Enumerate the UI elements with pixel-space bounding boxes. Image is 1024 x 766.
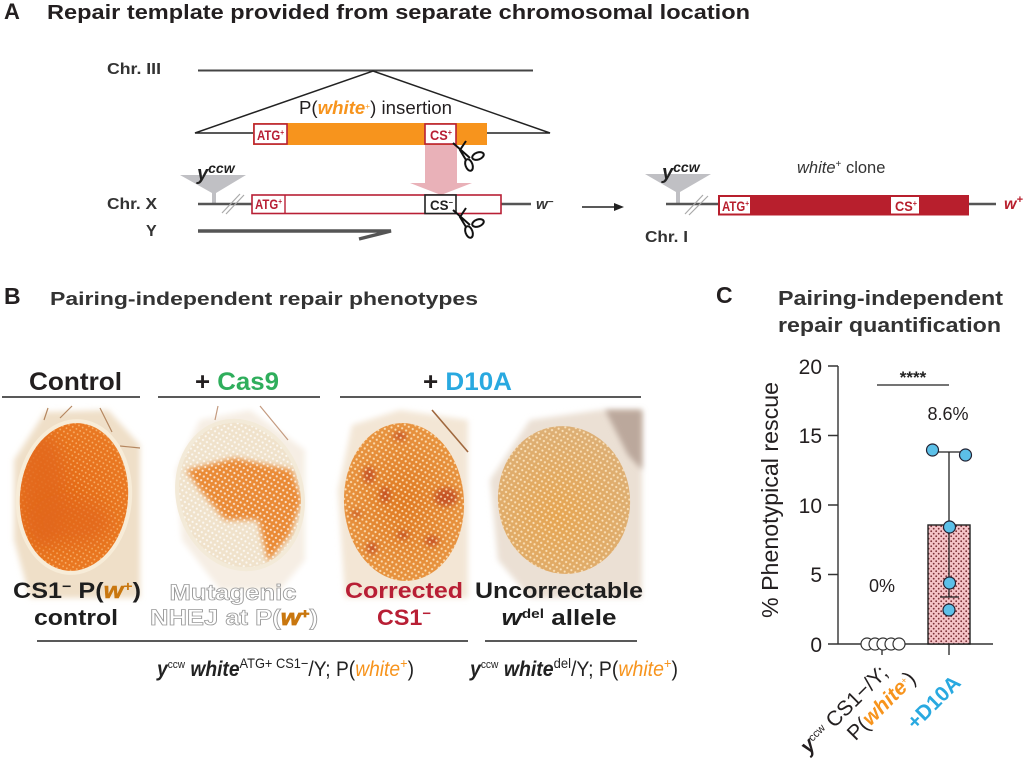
white- allele box <box>252 195 501 214</box>
CS+ box: CS <box>430 127 449 143</box>
y tick labels: 0 <box>810 634 822 657</box>
genotype bracket: ATG+ CS1-: white <box>355 658 400 681</box>
caption: Corrected CS1-: − <box>422 605 431 621</box>
x label: control <box>795 661 921 759</box>
y tick labels <box>799 356 822 657</box>
heading: panel A title: Repair template provided from separate chromosomal location <box>47 2 750 24</box>
y ccw marker: ccw <box>208 160 236 176</box>
panel letter C: C <box>716 282 733 308</box>
ATG+ white box: ATG <box>722 198 751 214</box>
caption: CS1- P(w+) control: control <box>34 605 118 630</box>
eye photo: control <box>9 406 140 598</box>
y ccw marker <box>180 160 246 204</box>
caption: CS1- P(w+) control: CS1 <box>13 578 56 603</box>
panel letter B: B <box>4 283 21 309</box>
caption: CS1- P(w+) control: w <box>104 578 125 603</box>
ATG+ box <box>254 124 287 144</box>
x label: control: ) <box>899 667 921 688</box>
heading: panel C title <box>778 288 1003 337</box>
genotype bracket: white del: y <box>469 658 482 681</box>
CS+ white box <box>891 197 919 214</box>
label: Chr. X: Chr. X <box>107 196 157 213</box>
ATG+ box: + <box>280 128 284 137</box>
x label: control: ccw <box>806 722 828 744</box>
Chr. III line <box>198 70 533 72</box>
genotype bracket: ATG+ CS1-: ccw <box>168 659 185 671</box>
genotype bracket: white del <box>469 641 678 681</box>
break mark <box>685 195 708 215</box>
label: Y: Y <box>146 223 157 240</box>
caption: Mutagenic NHEJ: Mutagenic <box>170 580 296 605</box>
y tick labels: 15 <box>799 425 822 448</box>
heading: panel B title: Pairing-independent repair phenotypes <box>50 289 478 309</box>
genotype bracket: ATG+ CS1-: ATG+ CS1− <box>240 655 308 671</box>
ATG+ allele label: ATG <box>255 196 284 212</box>
label: w-: w <box>536 196 548 213</box>
genotype bracket: white del: + <box>664 655 672 671</box>
arrow to clone <box>582 203 624 211</box>
x label: control: P(white <box>843 676 912 745</box>
value label 8.6%: 8.6% <box>927 404 969 424</box>
genotype bracket: white del: ccw <box>481 659 498 671</box>
genotype bracket: ATG+ CS1-: /Y; P( <box>308 658 355 681</box>
column header: Control <box>2 368 140 397</box>
caption: CS1- P(w+) control: + <box>123 578 133 594</box>
caption: Corrected CS1-: Corrected <box>345 578 463 603</box>
caption: Uncorrectable wdel allele: allele <box>544 605 616 630</box>
column header: + Cas9: + Cas9 <box>195 368 279 396</box>
ATG+ allele label: + <box>278 197 282 206</box>
genotype bracket: white del: white <box>498 658 554 681</box>
CS- box: CS <box>430 197 449 213</box>
caption: Uncorrectable wdel allele: del <box>522 606 544 621</box>
icon: scissors lower <box>453 208 485 239</box>
clone chromosome line <box>666 203 996 205</box>
caption: Mutagenic NHEJ: ) <box>309 605 318 630</box>
genotype bracket: white del: white <box>618 658 664 681</box>
genotype bracket: white del: del <box>554 655 571 671</box>
caption: Uncorrectable wdel allele <box>475 578 643 630</box>
red repaired bar <box>718 195 969 216</box>
y ccw marker, clone: ccw <box>673 159 701 175</box>
y axis and ticks <box>828 366 993 655</box>
label: P(white+) insertion: + <box>365 102 370 111</box>
ATG+ white box: + <box>745 199 749 208</box>
icon: scissors upper <box>453 141 485 172</box>
caption: CS1- P(w+) control: − <box>62 578 71 594</box>
eye photo: corrected D10A <box>338 410 468 598</box>
heading: panel C title: Pairing-independent <box>778 288 1003 310</box>
x label: +D10A: +D10A <box>903 671 966 734</box>
x label: control: y <box>795 733 821 759</box>
ATG+ box: ATG <box>257 127 286 143</box>
column header: + D10A: + D10A <box>423 368 512 396</box>
heading: panel C title: repair quantification <box>778 315 1001 337</box>
caption: Mutagenic NHEJ <box>150 580 318 630</box>
genotype bracket: ATG+ CS1-: white <box>185 658 240 681</box>
significance bar: **** <box>900 368 927 387</box>
caption: Uncorrectable wdel allele: w <box>502 605 524 630</box>
CS+ white box: + <box>913 199 917 208</box>
label: w-: − <box>548 197 554 208</box>
genotype bracket: white del: ) <box>672 658 678 681</box>
Chr. X line <box>198 203 531 205</box>
genotype bracket: ATG+ CS1- <box>37 641 468 681</box>
CS+ box: + <box>448 128 452 137</box>
caption: Corrected CS1- <box>345 578 463 630</box>
label: white+ clone: clone <box>841 159 885 177</box>
insertion triangle <box>195 71 550 133</box>
error bars <box>932 452 966 597</box>
label: Chr. III: Chr. III <box>107 61 161 78</box>
genotype bracket: ATG+ CS1-: + <box>400 655 408 671</box>
y ccw marker: y <box>197 163 208 185</box>
data points: D10A <box>926 444 972 616</box>
y tick labels: 5 <box>810 564 822 587</box>
Y chromosome <box>198 231 391 239</box>
break mark <box>222 194 244 214</box>
y axis title: % Phenotypical rescue <box>757 382 783 618</box>
pink transfer arrow <box>410 145 472 195</box>
y ccw marker, clone <box>645 159 711 204</box>
label: white+ clone: + <box>836 159 842 170</box>
CS+ white box: CS <box>895 198 914 214</box>
label: w+: + <box>1016 194 1023 206</box>
x label: control: + <box>898 675 909 686</box>
label: P(white+) insertion: P(white <box>299 98 364 118</box>
CS- box <box>425 195 456 214</box>
caption: Uncorrectable wdel allele: Uncorrectable <box>475 578 643 603</box>
x label: control: CS1−/Y; <box>817 661 893 736</box>
CS- box: − <box>449 198 453 207</box>
caption: Corrected CS1-: CS1 <box>377 605 420 630</box>
label: P(white+) insertion: ) insertion <box>370 98 452 118</box>
significance bar <box>877 368 949 387</box>
orange template bar <box>253 123 487 145</box>
caption: Mutagenic NHEJ: NHEJ at P( w <box>150 605 298 630</box>
label: white+ clone: white <box>797 159 836 177</box>
eye photo: uncorrectable <box>490 410 642 598</box>
genotype bracket: ATG+ CS1-: ) <box>408 658 414 681</box>
y ccw marker, clone: y <box>662 162 673 184</box>
genotype bracket: ATG+ CS1-: y <box>156 658 169 681</box>
y tick labels: 10 <box>799 495 822 518</box>
label: w+: w <box>1004 196 1016 213</box>
eye photo: Cas9 <box>175 406 306 592</box>
bar: +D10A <box>928 525 970 644</box>
caption: Mutagenic NHEJ: + <box>301 606 310 621</box>
value label 0%: 0% <box>869 576 895 596</box>
column header: Control: Control <box>29 368 122 396</box>
panel: repair template diagram <box>107 61 1023 246</box>
bar chart: phenotypical rescue <box>757 356 993 759</box>
data points: control <box>861 638 905 650</box>
CS+ box <box>425 124 456 144</box>
genotype bracket: white del: /Y; P( <box>571 658 618 681</box>
caption: CS1- P(w+) control <box>13 578 141 630</box>
caption: CS1- P(w+) control: P( <box>71 578 104 603</box>
label: Chr. I: Chr. I <box>645 229 688 246</box>
y tick labels: 20 <box>799 356 822 379</box>
caption: CS1- P(w+) control: ) <box>133 578 141 603</box>
